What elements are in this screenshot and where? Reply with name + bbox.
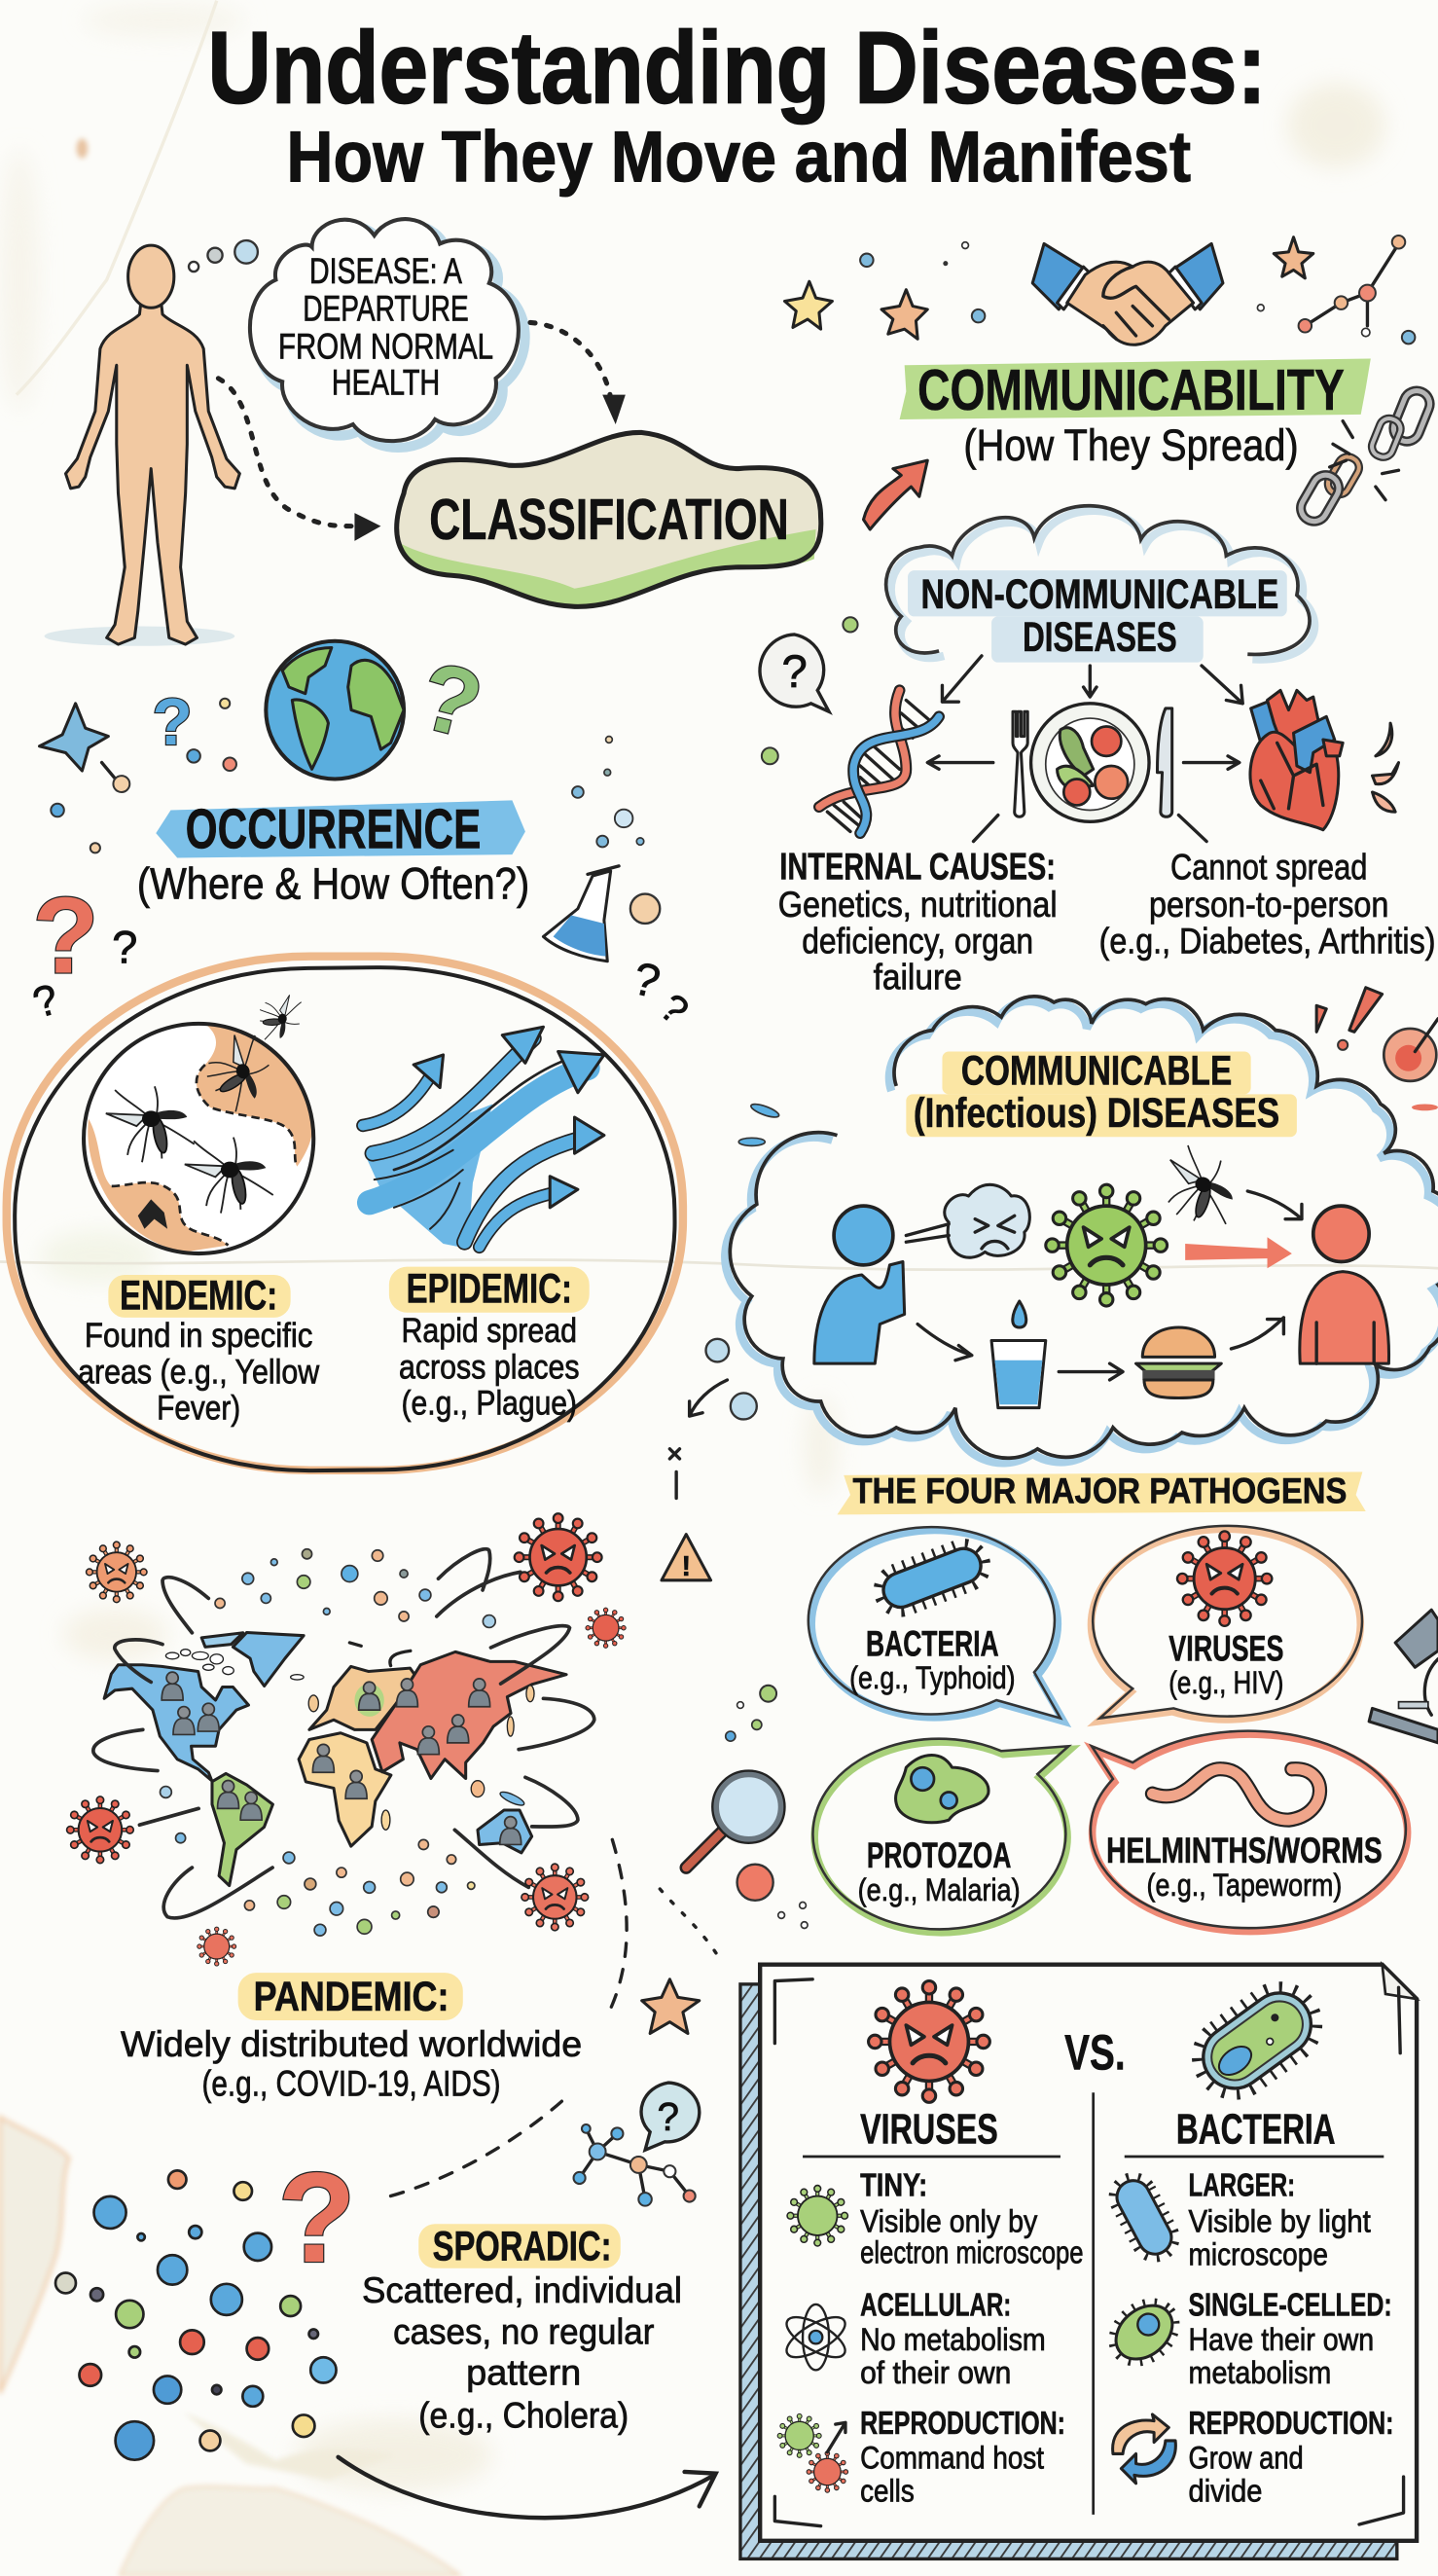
column: bacteria: metabolism <box>1189 2355 1331 2390</box>
icon: molecule with question bubble: ? <box>657 2094 679 2139</box>
label: pandemic: Widely distributed worldwide <box>121 2023 582 2064</box>
label: sporadic: (e.g., Cholera) <box>418 2394 629 2435</box>
text: cannot spread: person-to-person <box>1149 884 1388 925</box>
scattered sporadic dots <box>55 2170 337 2460</box>
panel: viruses vs bacteria <box>740 1965 1417 2558</box>
icon: anatomical heart <box>1250 690 1399 830</box>
icon: flask with bubbles <box>543 737 660 961</box>
red question mark: ? <box>277 2146 356 2289</box>
heading: occurrence: (Where & How Often?) <box>137 859 529 909</box>
blue drops and red alert marks <box>738 988 1438 1145</box>
cloud: disease definition <box>250 219 525 448</box>
text: internal causes: failure <box>874 956 962 997</box>
speech bubble: viruses: (e.g., HIV) <box>1168 1665 1283 1700</box>
icon: red virus <box>869 1981 989 2102</box>
label: pandemic: PANDEMIC: <box>254 1974 449 2019</box>
label: sporadic: Scattered, individual <box>362 2269 682 2310</box>
label: sporadic: SPORADIC: <box>433 2223 611 2268</box>
arrows: transmission routes <box>917 1191 1302 1380</box>
red and black question marks: ? <box>112 922 137 973</box>
text: internal causes: INTERNAL CAUSES: <box>779 846 1056 888</box>
label: sporadic <box>362 2223 682 2435</box>
heading: four major pathogens: THE FOUR MAJOR PATHOGENS <box>853 1470 1347 1511</box>
cloud: communicable diseases <box>725 997 1438 1463</box>
question marks and decorations around occurrence: ? <box>153 686 193 759</box>
label: epidemic: (e.g., Plague) <box>402 1383 577 1422</box>
title: How They Move and Manifest <box>286 116 1191 197</box>
label: endemic: Found in specific <box>85 1316 312 1355</box>
question bubble <box>760 617 858 764</box>
column: viruses: of their own <box>860 2355 1011 2390</box>
speech bubble: bacteria <box>809 1527 1063 1722</box>
cloud: communicable diseases: COMMUNICABLE <box>961 1047 1232 1093</box>
icon: globe <box>266 641 404 779</box>
dots around the map <box>161 1549 495 1936</box>
icon: cough cloud <box>906 1184 1029 1257</box>
cloud: disease definition: FROM NORMAL <box>278 326 493 367</box>
text: internal causes <box>778 846 1058 997</box>
icon: epidemic arrows <box>363 1027 604 1249</box>
icon: microscope <box>1369 1610 1438 1743</box>
label: sporadic: cases, no regular <box>393 2310 654 2351</box>
question marks and decorations around occurrence <box>39 641 492 853</box>
question marks and decorations around occurrence: ? <box>410 641 492 759</box>
label: endemic <box>78 1272 320 1427</box>
icon: coughing person <box>814 1206 905 1363</box>
icon: molecule with question bubble <box>574 2083 700 2206</box>
red and black question marks <box>27 875 698 1034</box>
column: bacteria: Have their own <box>1189 2322 1374 2357</box>
cloud: non-communicable diseases <box>886 506 1314 663</box>
column: viruses: electron microscope <box>860 2235 1084 2270</box>
decorative stars and molecule, top right <box>784 236 1415 344</box>
icon: water glass <box>991 1301 1046 1408</box>
star <box>642 1979 700 2033</box>
curved arrow to comparison panel <box>339 2457 716 2518</box>
cloud: disease definition: DEPARTURE <box>303 288 469 329</box>
icon: endemic map circle <box>84 991 313 1253</box>
text: internal causes: deficiency, organ <box>802 920 1033 961</box>
red arrow to communicability <box>863 460 927 529</box>
title <box>207 11 1267 197</box>
column: bacteria: Grow and <box>1189 2441 1304 2476</box>
icon: broken chain <box>1296 387 1434 526</box>
column: bacteria: LARGER: <box>1189 2167 1295 2203</box>
label: endemic: areas (e.g., Yellow <box>78 1352 320 1391</box>
column: viruses: No metabolism <box>860 2322 1046 2357</box>
speech bubble: bacteria: (e.g., Typhoid) <box>849 1660 1016 1695</box>
red transmission arrow <box>1185 1237 1292 1268</box>
column: viruses: TINY: <box>860 2167 927 2203</box>
column: viruses: cells <box>860 2473 915 2508</box>
classification blob: CLASSIFICATION <box>429 488 789 552</box>
column: viruses: REPRODUCTION: <box>860 2405 1065 2441</box>
icon: infected person <box>1300 1206 1389 1363</box>
warning sign and connectors: ! <box>681 1551 691 1582</box>
red and black question marks: ? <box>32 875 98 997</box>
speech bubble: helminths: (e.g., Tapeworm) <box>1147 1868 1342 1903</box>
column: bacteria: BACTERIA <box>1176 2106 1336 2154</box>
column: viruses: Visible only by <box>860 2204 1037 2239</box>
icon: handshake <box>1032 243 1223 345</box>
warning sign and connectors <box>662 1339 757 1582</box>
label: endemic: ENDEMIC: <box>120 1272 277 1318</box>
panel: endemic and epidemic oval <box>7 957 683 1473</box>
text: internal causes: Genetics, nutritional <box>778 884 1058 925</box>
cloud: non-communicable diseases: DISEASES <box>1023 614 1177 660</box>
label: pandemic: (e.g., COVID-19, AIDS) <box>202 2063 501 2104</box>
icon: bacterium <box>1191 1980 1323 2101</box>
cloud: non-communicable diseases: NON-COMMUNICABLE <box>921 571 1278 617</box>
column: viruses <box>777 2106 1084 2508</box>
label: epidemic: across places <box>399 1347 580 1386</box>
speech bubble: protozoa: (e.g., Malaria) <box>858 1872 1021 1907</box>
title: Understanding Diseases: <box>207 11 1267 125</box>
speech bubble: viruses <box>1092 1526 1362 1722</box>
column: viruses: VIRUSES <box>860 2106 998 2154</box>
column: viruses: ACELLULAR: <box>860 2287 1011 2323</box>
text: cannot spread: Cannot spread <box>1170 846 1367 887</box>
viruses around the map <box>67 1513 626 1966</box>
red and black question marks: ? <box>652 985 698 1034</box>
cloud: disease definition: DISEASE: A <box>309 250 462 291</box>
label: epidemic <box>389 1266 590 1422</box>
speech bubble: protozoa: PROTOZOA <box>867 1834 1011 1875</box>
divider <box>1093 2092 1095 2515</box>
cloud: communicable diseases: (Infectious) DISEASES <box>914 1090 1279 1136</box>
label: epidemic: Rapid spread <box>402 1311 577 1350</box>
text: vs: VS. <box>1064 2025 1126 2081</box>
column: bacteria <box>1105 2106 1393 2508</box>
text: cannot spread <box>1099 846 1435 961</box>
arrows out of non-communicable cloud <box>927 656 1242 842</box>
column: bacteria: Visible by light <box>1189 2204 1371 2239</box>
icon: plate with food and cutlery <box>1013 704 1172 821</box>
icon: DNA helix <box>819 690 939 833</box>
red and black question marks: ? <box>27 975 63 1028</box>
icon: mosquito <box>1148 1139 1252 1239</box>
heading: communicability <box>900 358 1371 470</box>
column: bacteria: divide <box>1189 2473 1262 2508</box>
pandemic world map <box>93 1549 594 1918</box>
speech bubble: viruses: VIRUSES <box>1168 1627 1283 1668</box>
icon: green virus <box>1046 1184 1168 1306</box>
column: viruses: Command host <box>860 2441 1044 2476</box>
label: epidemic: EPIDEMIC: <box>407 1266 572 1312</box>
heading: occurrence: OCCURRENCE <box>186 798 481 860</box>
dotted arrow: body to classification <box>218 379 380 541</box>
heading: communicability: (How They Spread) <box>963 420 1299 470</box>
column: bacteria: microscope <box>1189 2236 1328 2271</box>
speech bubble: protozoa <box>812 1739 1070 1933</box>
label: sporadic: pattern <box>466 2352 581 2393</box>
label: pandemic <box>121 1973 582 2104</box>
classification blob <box>397 432 821 606</box>
speech bubble: bacteria: BACTERIA <box>866 1622 999 1663</box>
dotted arrow: cloud to classification <box>530 322 626 424</box>
icon: magnifying glass and dots <box>686 1686 808 1929</box>
cloud: disease definition: HEALTH <box>332 362 440 403</box>
speech bubble: helminths <box>1091 1731 1408 1932</box>
question bubble: ? <box>781 646 808 698</box>
label: endemic: Fever) <box>157 1388 240 1427</box>
human figure <box>45 240 258 646</box>
icon: burger <box>1136 1327 1221 1398</box>
red and black question marks: ? <box>628 953 665 1009</box>
heading: occurrence <box>137 798 529 909</box>
dashed connectors <box>391 1839 722 2196</box>
